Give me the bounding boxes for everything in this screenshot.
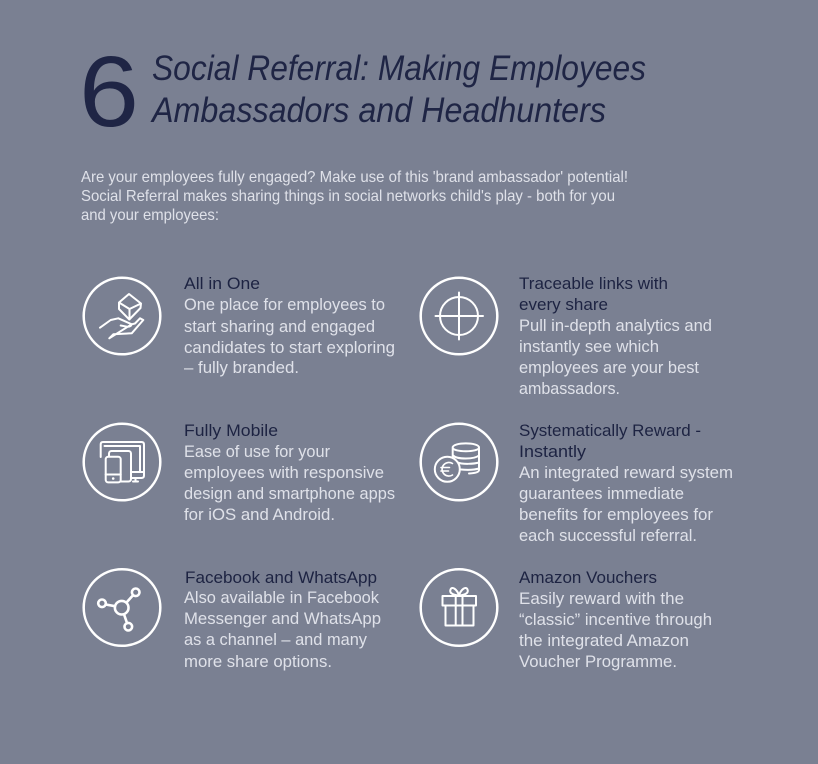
title: Social Referral: Making Employees [152,48,646,88]
text: traceable links: Pull in-depth analytics and [519,316,712,335]
panel: traceable links [421,274,712,398]
text: traceable links: every share [519,295,608,314]
text: fully mobile: design and smartphone apps [184,484,395,503]
icon: monitor tablet phone [84,424,160,500]
icon: gift box [421,569,497,646]
text: amazon vouchers: Voucher Programme. [519,652,677,671]
text: traceable links: instantly see which [519,337,659,356]
text: fully mobile [184,421,395,524]
text: facebook and whatsapp: Facebook and WhatsApp [185,568,377,587]
text: all in one [184,274,395,377]
intro text: and your employees: [81,207,219,224]
text: fully mobile: employees with responsive [184,463,384,482]
text: fully mobile: Ease of use for your [184,442,330,461]
text: all in one: One place for employees to [184,295,385,314]
text: fully mobile: Fully Mobile [184,421,278,440]
text: amazon vouchers [519,568,712,671]
intro text: Are your employees fully engaged? Make use of this 'brand ambassador' potential! [81,169,628,186]
text: traceable links [519,274,712,398]
panel: amazon vouchers [421,568,712,671]
text: facebook and whatsapp: Messenger and WhatsApp [184,609,381,628]
intro text [81,169,628,224]
text: traceable links: Traceable links with [519,274,668,293]
icon: network nodes [84,569,160,646]
title [150,48,646,130]
text: systematically reward: An integrated reward system [519,463,733,482]
text: fully mobile: for iOS and Android. [184,505,335,524]
text: all in one: start sharing and engaged [184,317,375,336]
text: facebook and whatsapp: more share options. [184,652,332,671]
text: systematically reward: benefits for employees for [519,505,713,524]
text: all in one: candidates to start exploring [184,338,395,357]
text: systematically reward: Instantly [519,442,587,461]
text: all in one: All in One [184,274,260,293]
text: amazon vouchers: Easily reward with the [519,589,684,608]
title: Ambassadors and Headhunters [150,90,606,130]
panel: systematically reward [421,421,733,545]
section number: 6 [79,36,139,148]
text: amazon vouchers: the integrated Amazon [519,631,689,650]
text: amazon vouchers: “classic” incentive through [519,610,712,629]
panel: fully mobile [84,421,395,524]
text: all in one: – fully branded. [184,358,299,377]
icon: hand holding cube [84,278,160,354]
text: facebook and whatsapp: Also available in Facebook [184,588,379,607]
panel: facebook and whatsapp [84,568,381,671]
icon: euro coins [421,424,497,500]
intro text: Social Referral makes sharing things in social networks child's play - both for you [81,188,615,205]
panel: all in one [84,274,395,377]
text: amazon vouchers: Amazon Vouchers [519,568,657,587]
text: systematically reward [519,421,733,545]
text: facebook and whatsapp: as a channel – and many [184,630,367,649]
text: systematically reward: Systematically Reward - [519,421,701,440]
text: systematically reward: guarantees immediate [519,484,684,503]
icon: crosshair target [421,278,497,354]
text: traceable links: ambassadors. [519,379,620,398]
text: traceable links: employees are your best [519,358,699,377]
text: systematically reward: each successful referral. [519,526,697,545]
text: facebook and whatsapp [184,568,381,671]
